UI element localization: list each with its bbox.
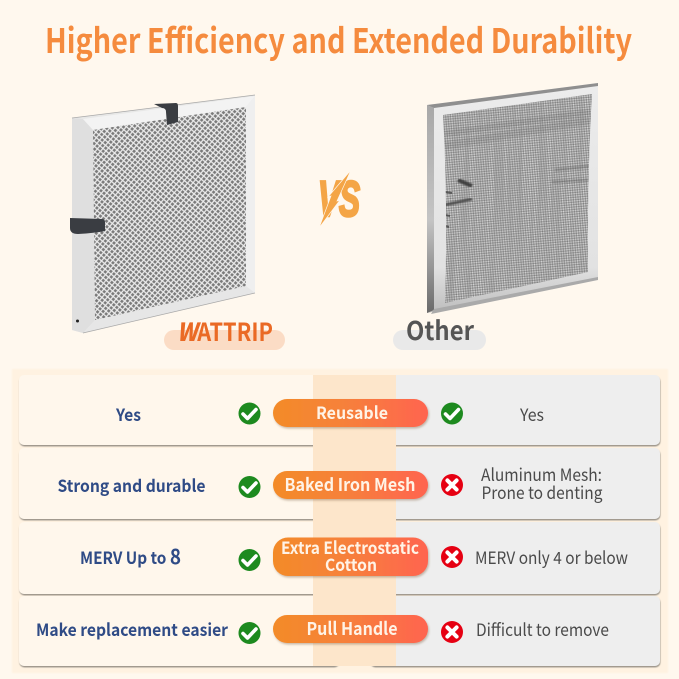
row 1: reusable: Yes [115, 401, 141, 426]
row 3: extra electrostatic cotton: MERV only 4 or below [475, 544, 628, 569]
other label: Other [406, 311, 475, 348]
row 2: baked iron mesh: Baked Iron Mesh [284, 472, 416, 497]
row 4: pull handle: Difficult to remove [476, 616, 609, 641]
row 3: extra electrostatic cotton: Extra Electrostatic [281, 534, 419, 559]
row 3: extra electrostatic cotton [80, 534, 628, 576]
icon: screw hole [76, 320, 79, 322]
row 2: baked iron mesh: Strong and durable [58, 472, 206, 497]
row 2: baked iron mesh: Aluminum Mesh: [481, 461, 602, 486]
WATTRIP filter image [70, 95, 255, 333]
row 4: pull handle [36, 615, 609, 644]
center band [313, 375, 396, 666]
icon: lightning bolt [319, 170, 351, 228]
other filter image [427, 83, 598, 314]
row 2: baked iron mesh: Prone to denting [482, 479, 603, 504]
Other pill [393, 311, 486, 350]
row 4: pull handle: Make replacement easier [36, 616, 229, 641]
brand logo: WATTRIP [177, 313, 273, 349]
row 2: baked iron mesh [58, 461, 603, 504]
row 1: reusable [115, 399, 544, 427]
VS badge: VS [318, 171, 360, 227]
row 3: extra electrostatic cotton: Cotton [325, 551, 377, 576]
VS badge [318, 170, 360, 228]
left column cards [19, 375, 339, 666]
row 1: reusable: Reusable [316, 399, 388, 424]
icon: side pull strap [70, 218, 105, 234]
panel: comparison table [12, 369, 668, 673]
icon: top pull strap [154, 103, 178, 125]
right column cards [370, 375, 660, 666]
WATTRIP pill [164, 313, 285, 350]
row 3: extra electrostatic cotton: MERV Up to 8 [80, 541, 181, 571]
row 4: pull handle: Pull Handle [306, 616, 398, 641]
row 1: reusable: Yes [519, 401, 544, 426]
